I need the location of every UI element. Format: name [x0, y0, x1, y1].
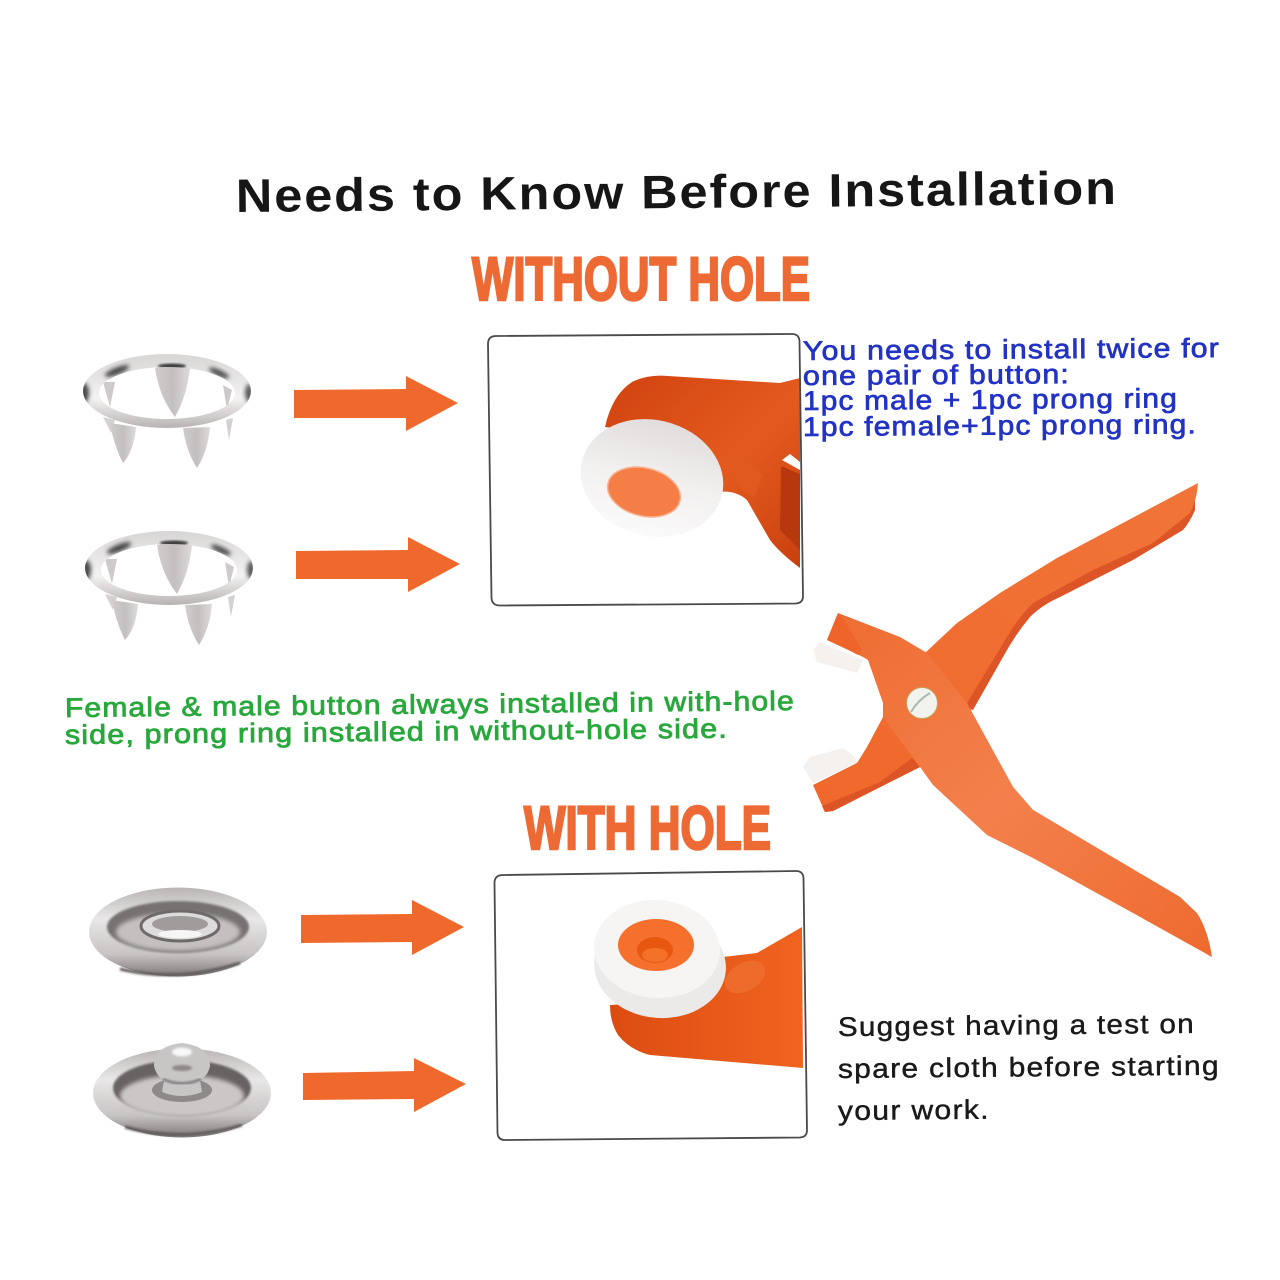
text: test suggestion: spare cloth before starting	[838, 1051, 1220, 1084]
heading: instructions blue	[803, 333, 1220, 442]
illustration: orange pliers	[803, 483, 1212, 957]
text: green note: Female & male button always installed in with-hole	[65, 686, 795, 723]
upper handle and lower jaw	[813, 483, 1198, 812]
arrow: top prong ring 1	[294, 376, 458, 431]
text: test suggestion	[838, 1009, 1220, 1126]
title: Needs to Know Before Installation	[236, 161, 1118, 222]
arrow: top prong ring 2	[296, 537, 460, 592]
under handle shadow strip	[955, 500, 1195, 710]
orange centre	[602, 460, 686, 524]
white die	[591, 896, 729, 1022]
text: test suggestion: Suggest having a test on	[838, 1009, 1195, 1042]
arrow: male button	[303, 1058, 466, 1112]
panel frame	[494, 871, 807, 1140]
heading: instructions blue: one pair of button:	[803, 359, 1070, 391]
icon: female snap button	[89, 888, 267, 976]
tool arm	[610, 927, 803, 1068]
panel: without-hole photo	[488, 334, 803, 606]
heading: instructions blue: You needs to install twice for	[803, 333, 1220, 366]
lower handle shadow edge	[967, 703, 1185, 902]
white die	[568, 404, 736, 552]
panel frame	[488, 334, 803, 606]
heading: instructions blue: 1pc male + 1pc prong ring	[803, 383, 1178, 416]
arrow: female button	[301, 900, 464, 955]
panel: with-hole photo	[494, 871, 807, 1140]
text: green note	[65, 686, 795, 750]
white dies	[803, 642, 863, 783]
heading: with hole: WITH HOLE	[524, 794, 771, 862]
text: green note: side, prong ring installed in without-hole side.	[65, 714, 728, 750]
tool arm	[605, 376, 800, 568]
heading: without hole: WITHOUT HOLE	[472, 245, 810, 313]
icon: prong ring top	[79, 354, 253, 468]
orange centre with hole	[618, 919, 694, 971]
icon: male snap button	[93, 1043, 271, 1138]
lower handle and upper jaw	[827, 613, 1212, 957]
pivot rivet	[906, 688, 938, 718]
heading: instructions blue: 1pc female+1pc prong ring.	[803, 409, 1197, 442]
arm window	[782, 454, 800, 470]
text: test suggestion: your work.	[838, 1095, 990, 1126]
icon: prong ring second	[81, 531, 255, 645]
